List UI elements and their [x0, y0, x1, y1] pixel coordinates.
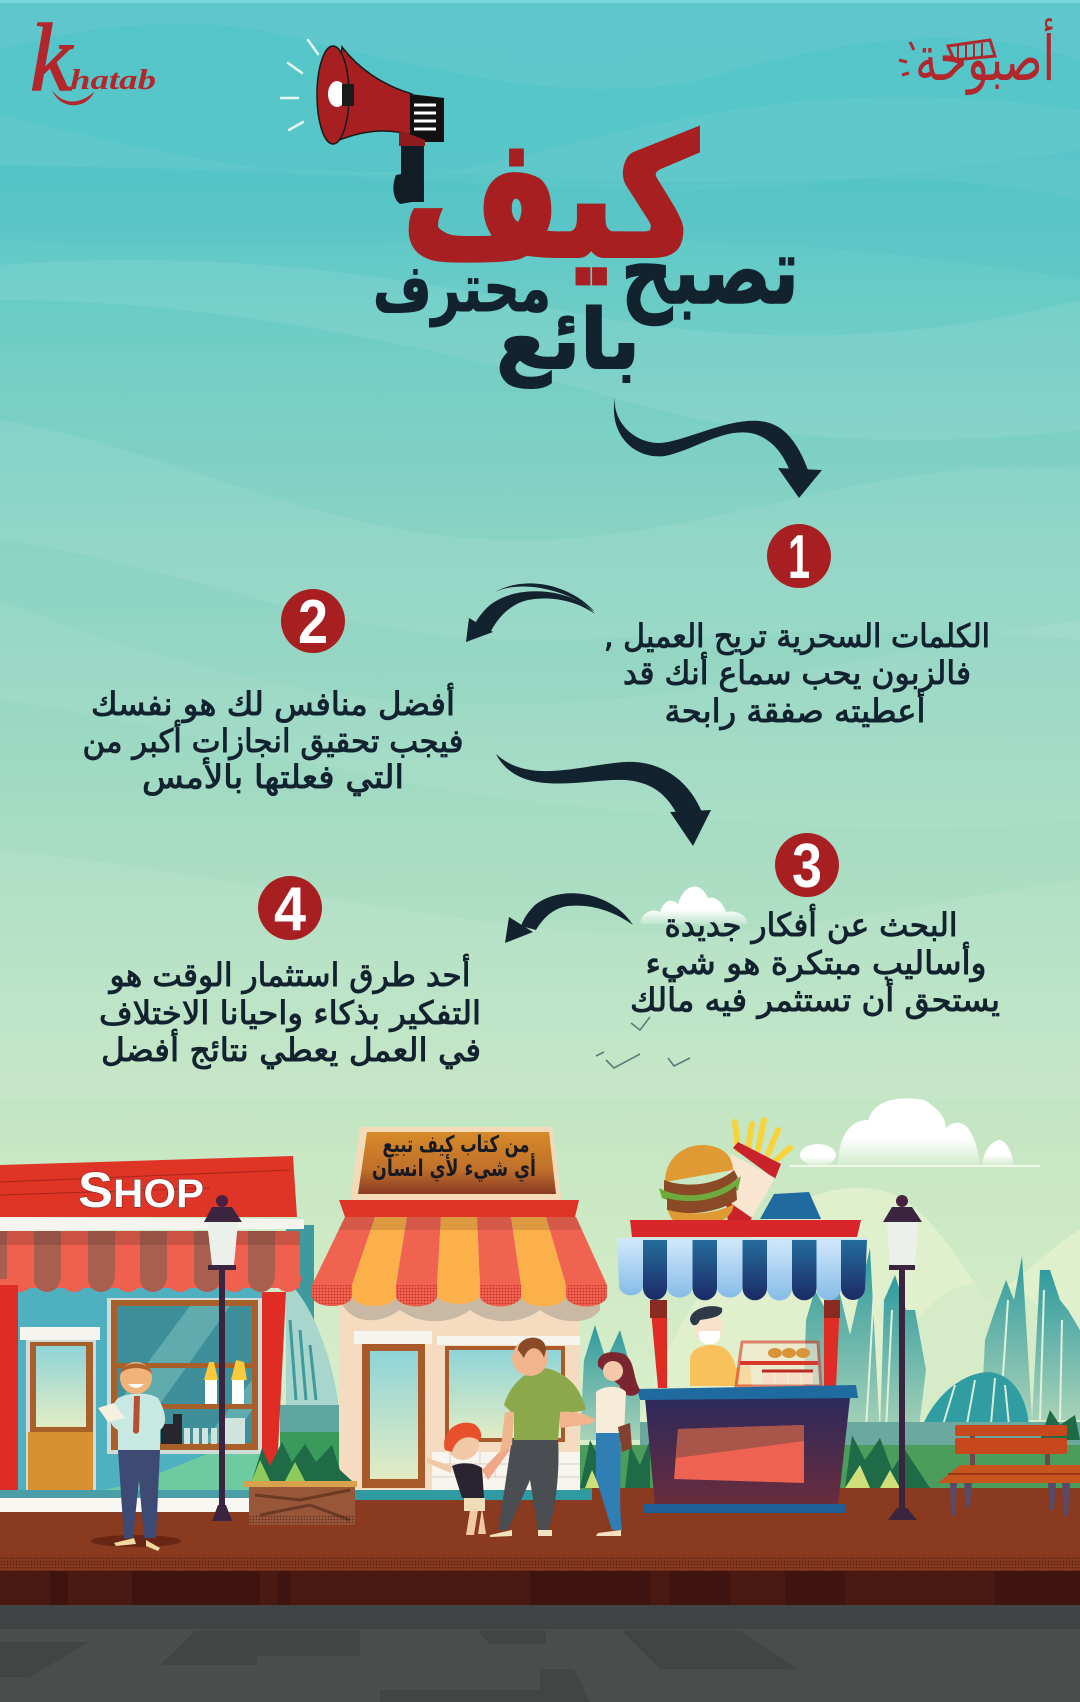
badge 3	[775, 832, 839, 901]
wall	[0, 1285, 262, 1490]
counter	[645, 1398, 850, 1506]
shop 2	[312, 1127, 607, 1500]
door	[20, 1327, 100, 1490]
text 4: في العمل يعطي نتائج أفضل	[101, 1029, 481, 1069]
sign text: من كتاب كيف تبيع	[382, 1132, 530, 1158]
sidewalk and curb	[0, 1488, 1080, 1605]
food kiosk	[617, 1120, 867, 1513]
window	[437, 1336, 580, 1442]
road	[0, 1605, 1080, 1702]
logo: Khatab	[30, 4, 156, 111]
roof	[630, 1220, 861, 1237]
arrow: title to step 1	[614, 397, 822, 498]
arrow: step 3 to step 4	[505, 893, 633, 943]
bench	[938, 1425, 1080, 1516]
text 4: التفكير بذكاء واحيانا الاختلاف	[99, 994, 481, 1032]
title: how to become a professional seller	[373, 102, 799, 388]
icon: megaphone	[281, 40, 444, 204]
text 1: فالزبون يحب سماع أنك قد	[623, 652, 971, 692]
logo: Khatab: k	[30, 4, 74, 111]
text 1: أعطيته صفقة رابحة	[664, 690, 926, 730]
plinth	[0, 1490, 250, 1498]
text 2: فيجب تحقيق انجازات أكبر من	[82, 720, 464, 760]
woman figure	[592, 1352, 640, 1536]
text 1	[604, 617, 990, 730]
word: tusbih: تصبح	[621, 218, 799, 326]
text 3: البحث عن أفكار جديدة	[664, 904, 958, 944]
display case	[736, 1342, 821, 1386]
scene backdrop: hills, foliage, water	[280, 1188, 1080, 1500]
logo: Khatab: hatab	[70, 65, 156, 96]
roof sign	[350, 1127, 562, 1202]
striped awning	[0, 1231, 301, 1292]
badge 1: 1	[788, 523, 810, 592]
text 2: التي فعلتها بالأمس	[142, 757, 404, 796]
red roof sign	[0, 1156, 297, 1217]
badge 4: 4	[274, 875, 306, 944]
text 4	[99, 954, 481, 1069]
cloud	[640, 887, 748, 924]
step 2	[82, 588, 464, 796]
icon: small shop awning	[948, 40, 995, 60]
lamp post 1	[204, 1195, 242, 1521]
text 2: أفضل منافس لك هو نفسك	[91, 683, 455, 723]
blue cap	[760, 1192, 821, 1219]
text 3: يستحق أن تستثمر فيه مالك	[630, 979, 1000, 1019]
arrow: step 2 to step 3	[496, 754, 711, 846]
wall	[339, 1280, 580, 1490]
father figure	[490, 1338, 596, 1537]
badge 4	[258, 875, 322, 944]
foliage spikes right	[580, 1248, 1080, 1440]
sign text: أي شيء لأي انسان	[372, 1152, 536, 1182]
text 3	[630, 904, 1000, 1019]
white cornice	[0, 1217, 304, 1231]
lamp post 2	[883, 1195, 922, 1520]
word: kayfa (red): كيف	[402, 102, 698, 294]
text 1: الكلمات السحرية تريح العميل ,	[604, 617, 990, 655]
sign text	[372, 1132, 536, 1182]
awning shadow	[340, 1290, 600, 1321]
salesman figure	[91, 1362, 181, 1551]
striped awning	[312, 1217, 607, 1306]
pillars	[0, 1285, 18, 1490]
word: bai: بائع	[496, 293, 640, 388]
badge 1	[767, 523, 831, 592]
shop 1	[0, 1156, 340, 1512]
SHOP label: SHOP	[78, 1162, 204, 1218]
posts	[650, 1300, 667, 1388]
badge 2	[281, 588, 345, 657]
step 1	[604, 523, 990, 730]
step 4	[99, 875, 481, 1069]
boy figure	[427, 1423, 510, 1535]
planter with plants	[243, 1442, 357, 1525]
step 3	[596, 832, 1000, 1068]
brick base	[432, 1452, 580, 1490]
awning	[617, 1238, 867, 1300]
shop window	[107, 1298, 262, 1454]
text 2	[82, 683, 464, 796]
arrow: step 1 to step 2	[466, 583, 595, 642]
door	[354, 1331, 432, 1488]
text 4: أحد طرق استثمار الوقت هو	[108, 954, 471, 994]
fries	[726, 1120, 790, 1224]
word: muhtarif: محترف	[373, 250, 551, 327]
birds	[596, 1017, 690, 1068]
burger	[659, 1145, 741, 1226]
bushes	[580, 1410, 1080, 1488]
red band	[339, 1200, 579, 1217]
badge 2: 2	[298, 588, 328, 657]
badge 3: 3	[792, 832, 822, 901]
big cloud	[790, 1098, 1040, 1166]
vendor	[690, 1306, 752, 1386]
text 3: وأساليب مبتكرة هو شيء	[646, 942, 986, 982]
